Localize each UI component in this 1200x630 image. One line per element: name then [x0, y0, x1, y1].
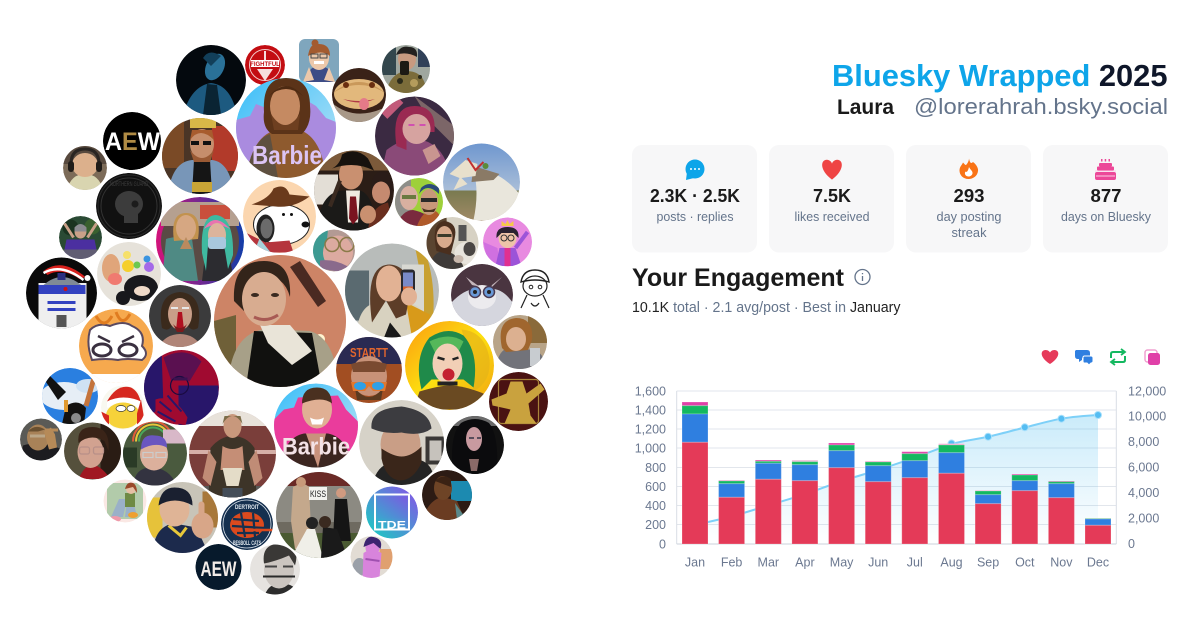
avatar: upside-down man in sunglasses: STARTT	[350, 345, 388, 360]
handle: @lorerahrah.bsky.social	[914, 94, 1168, 119]
avatar: couple with sunglasses	[395, 178, 443, 226]
avatar: red-collared woman in glasses	[64, 422, 122, 480]
left axis labels: 1,200	[635, 422, 666, 436]
bar: Jul	[902, 452, 928, 544]
panel: posts and replies	[632, 145, 757, 252]
left axis labels: 1,400	[635, 404, 666, 418]
bar: May	[829, 443, 855, 544]
avatar: R2-D2 with Santa hat	[26, 258, 97, 329]
left axis labels: 200	[645, 518, 666, 532]
avatar: purple cartoon	[350, 536, 392, 578]
display name: Laura	[837, 96, 894, 119]
stat label: days on Bluesky	[1061, 209, 1151, 224]
stat label: day posting	[936, 209, 1002, 224]
bar: Aug	[938, 444, 964, 544]
right axis labels: 2,000	[1128, 512, 1159, 526]
avatar: gecko	[332, 68, 386, 122]
avatar: green-haired illustration	[405, 321, 494, 410]
avatar: woman with rainbow sign	[123, 422, 187, 486]
bar: Dec	[1085, 518, 1111, 544]
avatar: Snoopy in cowboy hat	[243, 180, 316, 254]
bar: Apr	[792, 460, 818, 544]
avatar: woman with pink hair	[375, 96, 454, 176]
avatar: cartoon with glasses	[299, 39, 339, 82]
bar: Mar	[755, 460, 781, 544]
avatar: baby with headphones	[63, 146, 107, 190]
right axis labels: 10,000	[1128, 410, 1166, 424]
avatar: TDE logo: TDE	[378, 520, 406, 532]
cumulative area	[695, 415, 1098, 544]
avatar: Homer Simpson as Santa	[101, 386, 145, 430]
right axis labels: 8,000	[1128, 435, 1159, 449]
bar: Sep	[975, 490, 1001, 544]
bar: Feb	[719, 480, 745, 544]
avatar: woman with mickey ears	[59, 216, 102, 260]
left axis labels: 600	[645, 480, 666, 494]
icon: chat bubble	[686, 160, 704, 180]
avatar: wrestler in fur vest	[188, 410, 276, 498]
avatar: Barbie poster, smiling man	[274, 384, 358, 468]
avatar: golden statue crest	[489, 372, 548, 431]
avatar: AEW logo: AEW	[105, 128, 160, 156]
avatar: wedding kiss with sign: KISS	[310, 489, 326, 499]
avatar: TDE logo	[366, 486, 418, 538]
avatar: man in blue light	[176, 45, 246, 115]
avatar: woman with round glasses	[313, 230, 355, 272]
stat value: 2.3K · 2.5K	[650, 185, 741, 206]
left axis labels: 800	[645, 461, 666, 475]
right axis labels: 4,000	[1128, 486, 1159, 500]
legend icon: likes heart	[1042, 350, 1058, 364]
stat value: 7.5K	[813, 185, 852, 206]
month labels: Apr	[795, 556, 815, 570]
avatar: orange-haired cartoon	[79, 309, 153, 386]
panel: likes received	[769, 145, 894, 252]
avatar: Detroit baseball logo	[221, 498, 273, 550]
avatar: Fightful logo	[245, 45, 285, 85]
month labels: Feb	[721, 556, 742, 570]
avatar: red and navy duotone portrait	[144, 350, 219, 426]
chart grid	[677, 391, 1116, 544]
heading: Your Engagement: Your Engagement	[632, 264, 845, 292]
avatar: Northern Guard skull badge	[96, 173, 162, 239]
avatar: line sketch	[515, 269, 555, 309]
month labels: Sep	[977, 556, 999, 570]
avatar: pink chibi with crown	[483, 218, 532, 266]
avatar: Barbie poster, long-haired man: Barbie	[252, 140, 322, 170]
icon: heart	[822, 160, 842, 180]
right axis labels	[1128, 384, 1166, 551]
avatar: couple with gradient ring	[156, 197, 244, 285]
avatar: Detroit baseball logo: DERTROIT	[235, 505, 259, 511]
avatar: man with bloody nose	[149, 285, 211, 347]
right axis labels: 0	[1128, 537, 1135, 551]
stat label: likes received	[794, 209, 870, 224]
avatar: man with beer	[382, 45, 430, 93]
bar: Oct	[1012, 474, 1038, 544]
month labels: Jan	[685, 556, 705, 570]
avatar: AEW logo	[103, 112, 161, 170]
avatar: woman in mirror selfie	[345, 244, 439, 338]
avatar: Barbie poster, long-haired man	[236, 78, 336, 178]
right axis labels: 6,000	[1128, 460, 1159, 474]
avatar: plush bear with heart balloons	[97, 242, 161, 306]
bar: Jun	[865, 461, 891, 544]
panel: days on Bluesky	[1043, 145, 1168, 252]
avatar: man with megaphone	[40, 368, 100, 424]
month labels: Mar	[758, 556, 779, 570]
avatar: man in dark teal shirt	[422, 470, 472, 520]
avatar: Fightful logo: FIGHTFUL	[250, 62, 280, 68]
month labels: Nov	[1050, 556, 1073, 570]
stat label line two: streak	[952, 225, 987, 240]
avatar: long dark-haired woman	[446, 416, 504, 474]
chart legend	[1042, 349, 1160, 365]
avatar: man in hat and tie	[314, 150, 394, 230]
avatar: wedding kiss with sign	[276, 472, 362, 558]
avatar: Northern Guard skull badge: NORTHERN GUARD	[110, 182, 148, 188]
avatar: Barbie poster, smiling man: Barbie	[282, 434, 350, 460]
month labels: May	[830, 556, 854, 570]
avatar: horse skull in veil	[443, 144, 520, 220]
cumulative line	[695, 415, 1098, 525]
month labels: Aug	[940, 556, 963, 570]
title: Bluesky Wrapped 2025	[832, 58, 1168, 93]
avatar: AEW small logo	[196, 544, 242, 590]
avatar: cat in glasses	[451, 264, 513, 326]
avatar: 80s woman	[493, 315, 547, 369]
avatar: AEW small logo: AEW	[200, 558, 237, 581]
icon: flame	[960, 158, 978, 179]
avatar: man flipping off	[20, 418, 62, 460]
avatar: woman with dog	[426, 217, 478, 269]
month labels: Dec	[1087, 556, 1109, 570]
stat label: posts · replies	[656, 209, 734, 224]
bar: Jan	[682, 402, 708, 544]
month labels: Jun	[868, 556, 888, 570]
avatar: man in denim jacket	[162, 118, 238, 194]
left axis labels: 0	[659, 538, 666, 552]
avatar: upside-down man in sunglasses	[336, 337, 402, 403]
right axis labels: 12,000	[1128, 384, 1166, 398]
cumulative points	[948, 412, 1102, 447]
month labels	[685, 556, 1109, 570]
engagement summary: 10.1K total · 2.1 avg/post · Best in January	[632, 300, 901, 316]
panel: day posting streak	[906, 145, 1031, 252]
left axis labels: 1,000	[635, 442, 666, 456]
legend icon: replies	[1075, 350, 1093, 365]
avatar: woman in black vest, largest bubble	[214, 255, 346, 387]
avatar: sitting cartoon woman	[104, 480, 146, 522]
month labels: Jul	[907, 556, 923, 570]
stat value: 293	[954, 185, 984, 206]
left axis labels: 1,600	[635, 384, 666, 398]
legend icon: reposts	[1111, 349, 1125, 365]
month labels: Oct	[1015, 556, 1035, 570]
icon: birthday cake	[1095, 159, 1116, 180]
legend icon: quotes	[1145, 350, 1160, 365]
left axis labels	[635, 384, 666, 552]
icon: info	[855, 270, 870, 284]
avatar: bearded man in flat cap	[359, 400, 444, 486]
chart: monthly engagement stacked bars and cumulative line	[635, 384, 1166, 570]
avatar: monochrome man	[250, 544, 300, 594]
left axis labels: 400	[645, 499, 666, 513]
avatar: man with thumbs up	[146, 482, 218, 554]
stat value: 877	[1090, 185, 1122, 206]
avatar: Detroit baseball logo: BESBOLL CATS	[233, 541, 261, 547]
bubble cloud: followed accounts	[20, 39, 555, 594]
bar: Nov	[1048, 481, 1074, 544]
